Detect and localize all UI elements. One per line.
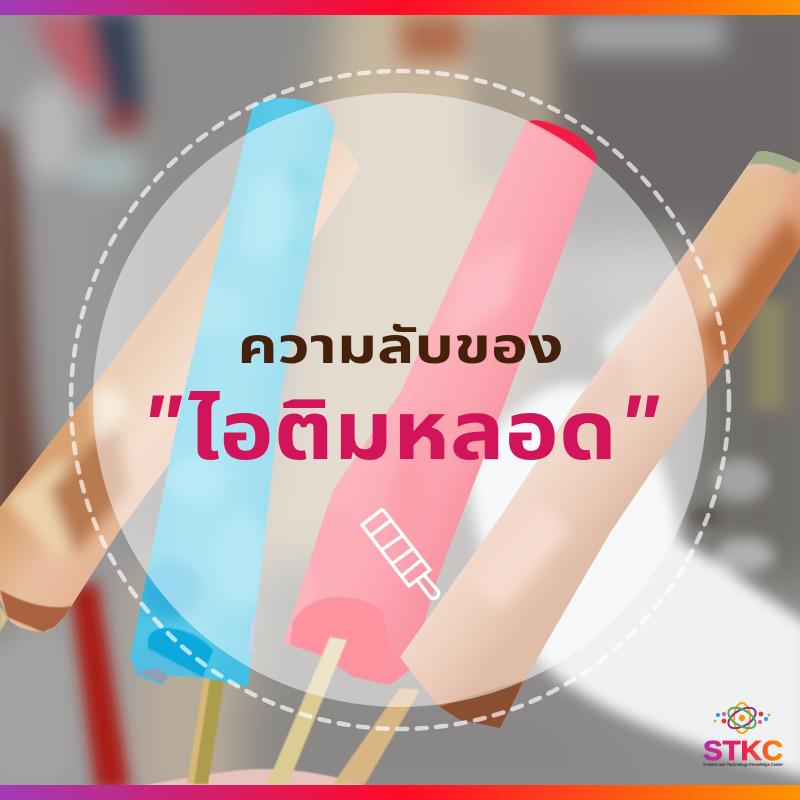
popsicle: pink <box>275 110 605 700</box>
icon: popsicle outline <box>362 510 439 598</box>
popsicle: left tan <box>0 130 365 640</box>
top gradient bar <box>0 0 800 15</box>
dashed circle ring <box>71 71 729 729</box>
popsicle: blue <box>120 90 340 690</box>
opening quote: " <box>141 378 183 474</box>
popsicle word: ไอติมหลอด <box>188 386 617 477</box>
logo wordmark: STKC <box>703 735 783 766</box>
closing quote: " <box>618 378 660 474</box>
logo atom icon <box>714 703 770 733</box>
title line 1: ความลับของ <box>238 318 564 374</box>
title line 2 <box>141 378 660 477</box>
bottom gradient bar <box>0 785 800 800</box>
popsicle sticks <box>0 606 420 784</box>
translucent circle panel <box>93 93 707 707</box>
logo tagline: Science and Technology Knowledge Center <box>703 762 783 767</box>
logo: STKC <box>703 703 783 767</box>
hand at bottom edge <box>140 769 368 786</box>
popsicle: right tan <box>390 140 800 735</box>
pink popsicle stick <box>267 637 347 784</box>
